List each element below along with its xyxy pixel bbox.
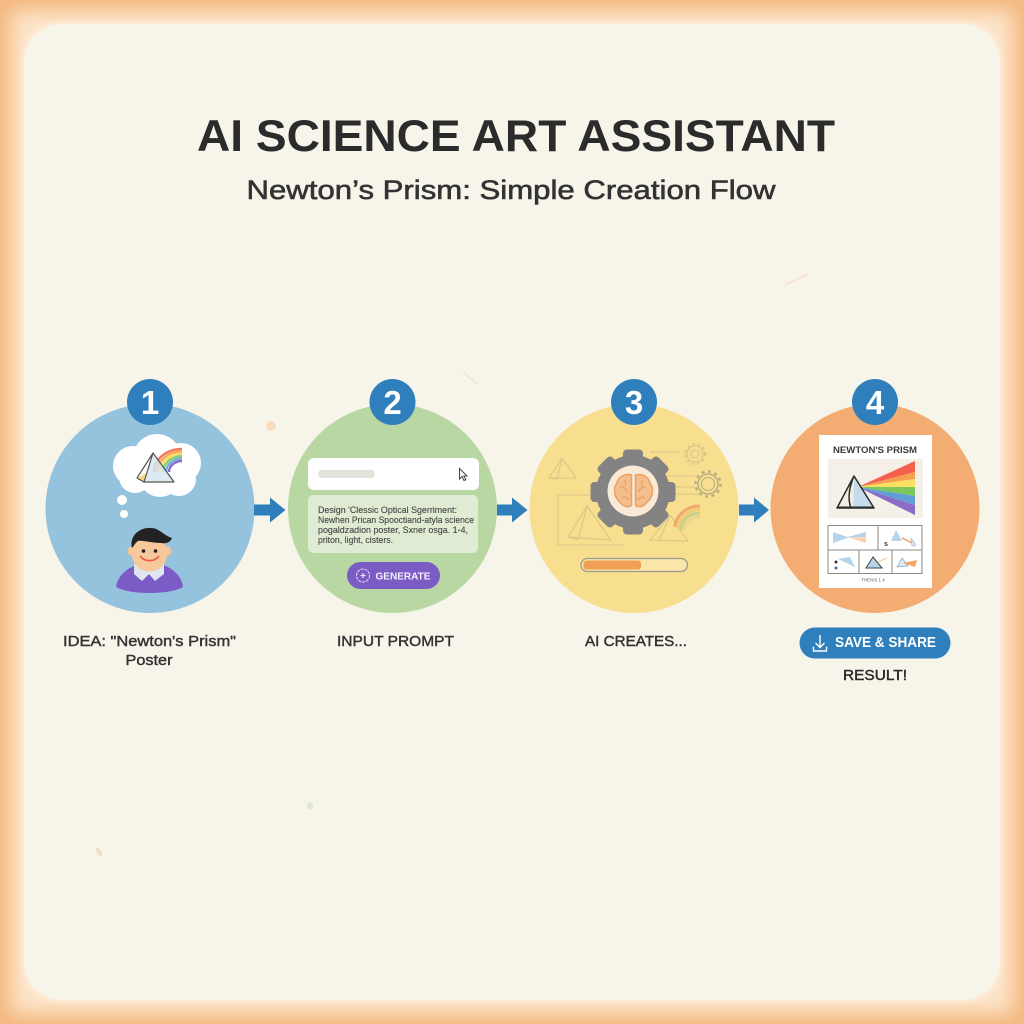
grid of five small diagrams — [828, 526, 922, 574]
step 3: AI creates — [530, 404, 738, 613]
finished poster — [819, 435, 932, 588]
number badge 3: 3 — [625, 384, 643, 421]
step 4: result — [770, 404, 980, 613]
generate button — [347, 562, 440, 589]
arrow 1 to 2 — [254, 498, 286, 522]
number badge 4 — [852, 379, 898, 425]
step 1: idea — [46, 404, 254, 613]
prompt text box: Design 'Clessic Optical Sgerriment: — [318, 505, 457, 515]
faint sketch prisms and gears — [549, 444, 720, 545]
number badge 1: 1 — [141, 384, 159, 421]
thought cloud with prism — [113, 434, 201, 518]
step label 1 — [63, 634, 236, 669]
number badge 3 — [611, 379, 657, 425]
finished poster: NEWTON'S PRISM — [833, 445, 917, 456]
step label 1: Poster — [126, 653, 173, 669]
step 2: input prompt — [288, 404, 497, 613]
step label 3: AI CREATES... — [585, 634, 687, 650]
prompt text box: Newhen Prican Spooctiand-atyla science — [318, 515, 474, 525]
number badge 2 — [370, 379, 416, 425]
prompt text box — [308, 495, 478, 553]
subtitle: Newton’s Prism: Simple Creation Flow — [246, 175, 776, 205]
number badge 1 — [127, 379, 173, 425]
circle 4 background — [770, 404, 980, 613]
input field with cursor — [308, 458, 479, 490]
prompt text box: priton, light, cisters. — [318, 535, 393, 545]
save and share button — [800, 628, 950, 658]
number badge 2: 2 — [383, 384, 402, 421]
save and share button: SAVE & SHARE — [835, 635, 936, 651]
number badge 4: 4 — [866, 384, 885, 421]
paper speckles — [95, 274, 808, 857]
prism spectrum illustration — [828, 459, 923, 518]
generate button: GENERATE — [376, 570, 430, 582]
prompt text box: pogaldzadion poster, Sxner osga. 1-4, — [318, 525, 468, 535]
faint rainbow — [675, 506, 700, 530]
progress bar — [581, 558, 688, 572]
step label 4: RESULT! — [843, 668, 907, 684]
gear with brain — [590, 450, 676, 534]
arrow 2 to 3 — [497, 498, 528, 522]
circle 1 background — [46, 404, 254, 613]
grid of five small diagrams: s — [884, 541, 888, 548]
arrow 3 to 4 — [739, 498, 769, 522]
finished poster: THEN'S 1 4 — [861, 578, 885, 582]
person icon — [116, 528, 183, 593]
circle 3 background — [530, 404, 738, 613]
step label 2: INPUT PROMPT — [337, 634, 454, 650]
step label 1: IDEA: "Newton's Prism" — [63, 634, 236, 650]
circle 2 background — [288, 404, 497, 613]
title: AI SCIENCE ART ASSISTANT — [197, 112, 835, 161]
